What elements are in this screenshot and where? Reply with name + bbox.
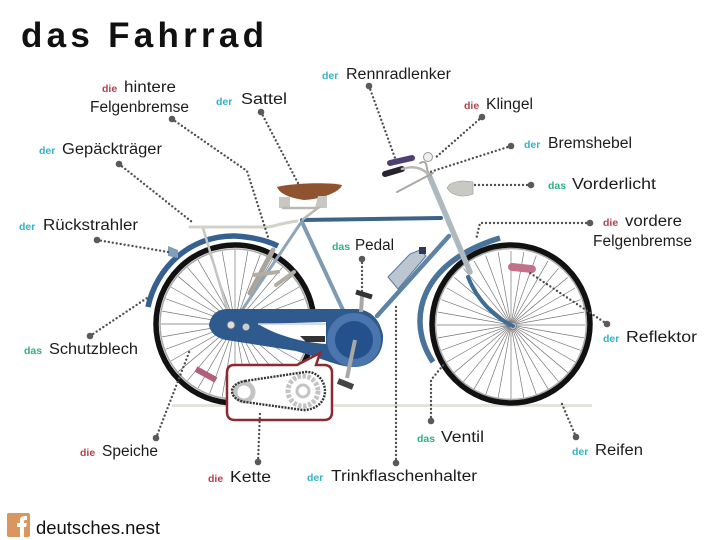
label: die Speiche: Speiche (102, 443, 158, 460)
label: der Gepäckträger: Gepäckträger (62, 141, 162, 158)
label: die vordere Felgenbremse: vordere (625, 213, 682, 230)
label: die vordere Felgenbremse: Felgenbremse (593, 233, 692, 250)
label: der Gepäckträger: der (39, 145, 55, 157)
handlebar (385, 152, 433, 192)
label: der Trinkflaschenhalter: der (307, 472, 323, 484)
label: der Rückstrahler: der (19, 221, 35, 233)
pedals and cranks (338, 292, 372, 387)
label: die Klingel: die (464, 100, 479, 112)
footer: source: deutsches.nest (36, 518, 160, 538)
label: der Reflektor: Reflektor (626, 329, 697, 346)
label: das Pedal (332, 237, 394, 254)
label: das Vorderlicht (548, 176, 657, 193)
label: der Reifen: Reifen (595, 442, 643, 459)
label: die Speiche: die (80, 447, 95, 459)
label: das Pedal: Pedal (355, 237, 394, 254)
label: die Kette (208, 469, 271, 486)
label: das Schutzblech: Schutzblech (49, 341, 138, 358)
label: der Sattel (216, 91, 287, 108)
label: der Rennradlenker: der (322, 70, 338, 82)
chain case (209, 309, 383, 367)
label: der Reifen: der (572, 446, 588, 458)
label: der Trinkflaschenhalter: Trinkflaschenhalter (331, 468, 477, 485)
label: das Vorderlicht: Vorderlicht (572, 176, 657, 193)
icon: facebook logo (7, 513, 30, 537)
water bottle (388, 247, 426, 289)
rear mudguard (148, 236, 278, 307)
label: das Schutzblech: das (24, 345, 42, 357)
front sprocket (288, 376, 318, 406)
label: der Rennradlenker: Rennradlenker (346, 66, 451, 83)
label: die Kette: Kette (230, 469, 271, 486)
label: der Bremshebel: der (524, 139, 540, 151)
label: die Klingel (464, 96, 533, 113)
callout: chain detail (227, 353, 332, 420)
rear reflector (196, 369, 216, 380)
label: die hintere Felgenbremse: Felgenbremse (90, 99, 189, 116)
saddle (277, 183, 342, 220)
rear wheel (156, 245, 314, 403)
ground line (172, 404, 592, 407)
label: die hintere Felgenbremse (90, 79, 189, 116)
front light (447, 181, 473, 196)
label: die Klingel: Klingel (486, 96, 533, 113)
label: die hintere Felgenbremse: hintere (124, 79, 176, 96)
label: das Vorderlicht: das (548, 180, 566, 192)
label: der Bremshebel: Bremshebel (548, 135, 632, 152)
label: der Reflektor: der (603, 333, 619, 345)
label: die vordere Felgenbremse: die (603, 217, 618, 229)
front reflector (508, 263, 536, 273)
label: die hintere Felgenbremse: die (102, 83, 117, 95)
label: der Reifen (572, 442, 643, 459)
label: die Kette: die (208, 473, 223, 485)
title: das Fahrrad (21, 16, 264, 55)
leader lines (87, 83, 610, 466)
bicycle frame (190, 175, 513, 326)
front mudguard (420, 238, 500, 362)
label: das Ventil: Ventil (441, 429, 484, 446)
front wheel (432, 245, 590, 403)
label: der Sattel: der (216, 96, 232, 108)
label: das Pedal: das (332, 241, 350, 253)
label: das Ventil: das (417, 433, 435, 445)
chain loop (232, 372, 325, 410)
label: die vordere Felgenbremse (593, 213, 692, 250)
label: das Ventil (417, 429, 484, 446)
rear light reflector (168, 246, 178, 258)
label: der Sattel: Sattel (241, 91, 287, 108)
rear sprocket (235, 383, 253, 401)
label: der Rückstrahler: Rückstrahler (43, 217, 138, 234)
label: der Reflektor (603, 329, 697, 346)
